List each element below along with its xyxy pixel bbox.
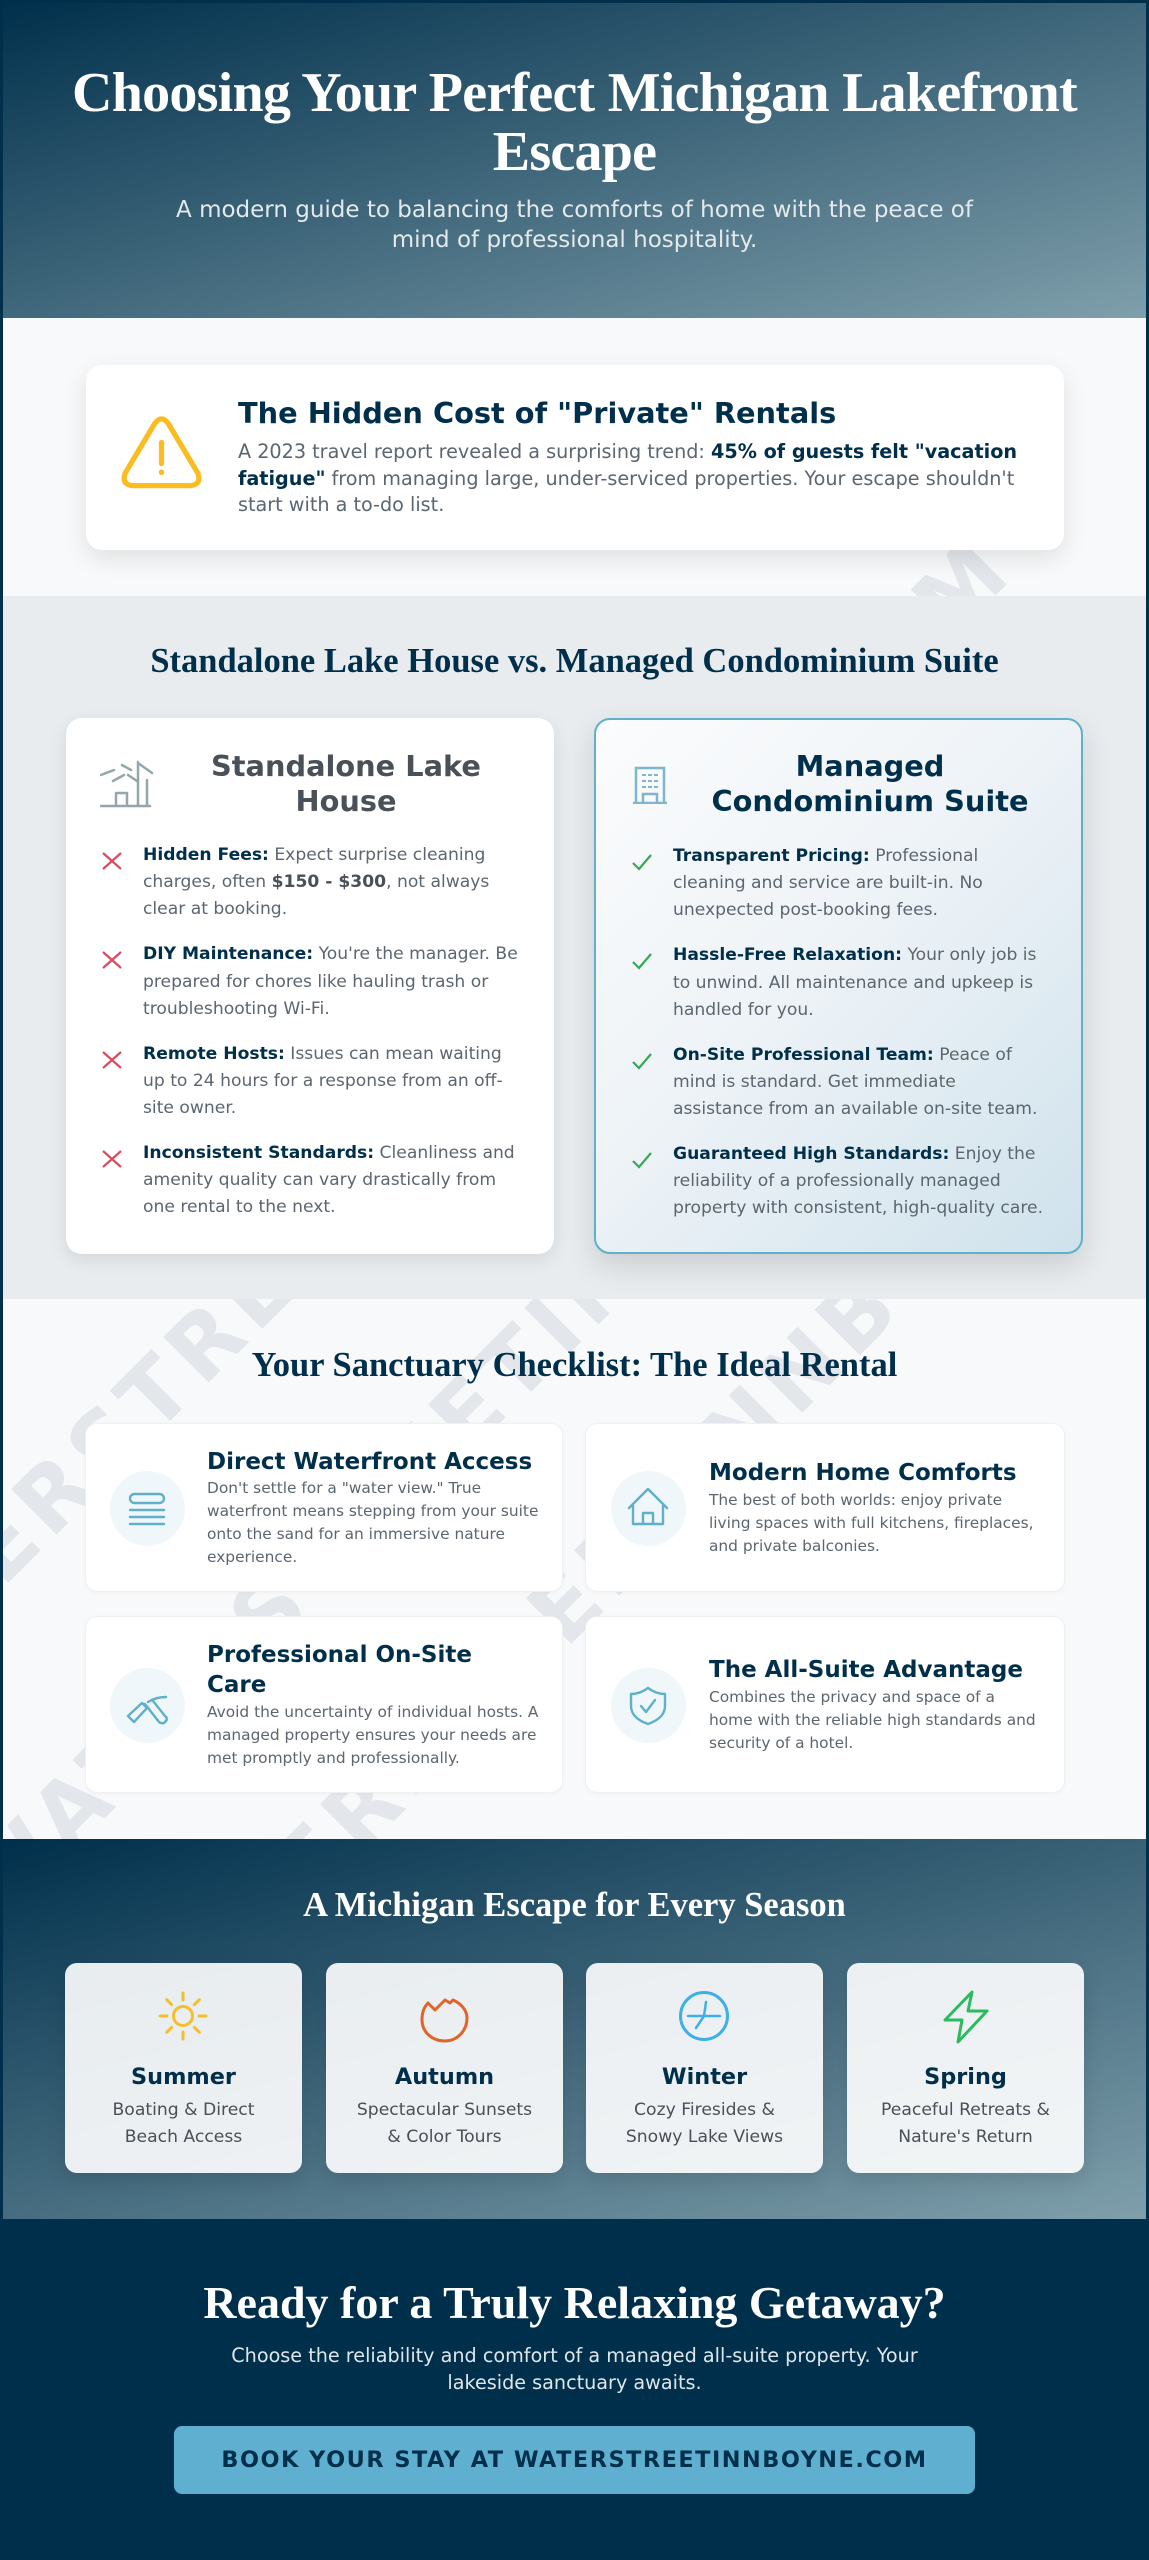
cta text xyxy=(231,2344,918,2394)
list item xyxy=(632,1144,1043,1218)
list item: charges, often $150 - $300, not always xyxy=(143,872,489,892)
feature text: onto the sand for an immersive nature xyxy=(207,1525,505,1543)
callout text: fatigue" from managing large, under-serviced properties. Your escape shouldn't xyxy=(238,467,1014,490)
list item: Guaranteed High Standards: Enjoy the xyxy=(673,1144,1035,1164)
card heading: Managed xyxy=(796,749,944,783)
panel: spring xyxy=(847,1963,1084,2173)
list item: mind is standard. Get immediate xyxy=(673,1072,956,1092)
season text xyxy=(881,2100,1050,2146)
feature text xyxy=(708,1491,1034,1555)
list item: handled for you. xyxy=(673,1000,814,1020)
list item: unexpected post-booking fees. xyxy=(673,900,938,920)
feature text: managed property ensures your needs are xyxy=(207,1726,536,1744)
feature text: experience. xyxy=(207,1548,297,1566)
feature title: Modern Home Comforts xyxy=(709,1460,1017,1486)
icon: house xyxy=(611,1471,686,1546)
list item xyxy=(632,945,1036,1020)
list item: Remote Hosts: Issues can mean waiting xyxy=(143,1044,502,1064)
panel: all-suite advantage xyxy=(585,1616,1065,1793)
feature text: met promptly and professionally. xyxy=(207,1749,460,1767)
season text xyxy=(626,2100,783,2146)
list item: DIY Maintenance: You're the manager. Be xyxy=(143,944,518,964)
call to action xyxy=(0,2219,1149,2560)
comparison section xyxy=(0,596,1149,1299)
subtitle: A modern guide to balancing the comforts of home with the peace of xyxy=(176,197,973,223)
icon: shield check xyxy=(611,1668,686,1743)
checklist heading: Your Sanctuary Checklist: The Ideal Rental xyxy=(252,1346,897,1384)
icon: cross xyxy=(102,1150,122,1168)
feature text: Combines the privacy and space of a xyxy=(709,1688,995,1706)
panel: direct waterfront access xyxy=(85,1423,563,1592)
panel: summer xyxy=(65,1963,302,2173)
season text: Beach Access xyxy=(125,2126,242,2146)
subtitle xyxy=(176,197,974,253)
icon: cross xyxy=(102,1051,122,1069)
list item: property with consistent, high-quality care. xyxy=(673,1198,1043,1218)
panel: winter xyxy=(586,1963,823,2173)
panel: autumn xyxy=(326,1963,563,2173)
callout text: A 2023 travel report revealed a surprising trend: 45% of guests felt "vacation xyxy=(238,440,1017,463)
icon: cross xyxy=(102,951,122,969)
card heading: House xyxy=(295,784,397,818)
season text: Spectacular Sunsets xyxy=(357,2100,532,2120)
season text: Snowy Lake Views xyxy=(626,2126,783,2146)
list item: amenity quality can vary drastically from xyxy=(143,1170,496,1190)
list item: cleaning and service are built-in. No xyxy=(673,873,983,893)
cta button xyxy=(174,2426,975,2494)
list item: On-Site Professional Team: Peace of xyxy=(673,1045,1012,1065)
card heading xyxy=(711,749,1028,818)
season name: Spring xyxy=(924,2064,1007,2090)
feature title xyxy=(207,1642,472,1698)
list item: Hassle-Free Relaxation: Your only job is xyxy=(673,945,1036,965)
season text xyxy=(357,2100,532,2146)
panel: professional on-site care xyxy=(85,1616,563,1793)
title: Choosing Your Perfect Michigan Lakefront xyxy=(72,62,1077,124)
feature text: living spaces with full kitchens, fireplaces, xyxy=(709,1514,1034,1532)
panel: managed condominium suite xyxy=(594,718,1083,1254)
feature title: Care xyxy=(207,1672,266,1698)
cta text: lakeside sanctuary awaits. xyxy=(447,2370,702,2394)
panel: standalone lake house xyxy=(66,718,554,1254)
callout text xyxy=(238,440,1017,516)
cta text: Choose the reliability and comfort of a managed all-suite property. Your xyxy=(231,2344,918,2366)
feature title: Professional On-Site xyxy=(207,1642,472,1668)
card heading xyxy=(211,749,481,818)
season name: Autumn xyxy=(395,2064,494,2090)
feature title: Direct Waterfront Access xyxy=(207,1449,532,1475)
cta button: BOOK YOUR STAY AT WATERSTREETINNBOYNE.COM xyxy=(221,2447,928,2473)
card heading: Standalone Lake xyxy=(211,749,481,783)
callout text: start with a to-do list. xyxy=(238,493,444,516)
seasons section xyxy=(0,1839,1149,2219)
intro section xyxy=(81,383,1069,563)
seasons heading: A Michigan Escape for Every Season xyxy=(303,1886,846,1924)
season name: Winter xyxy=(662,2064,747,2090)
feature text: Avoid the uncertainty of individual hosts. A xyxy=(207,1703,538,1721)
feature text xyxy=(207,1479,538,1566)
feature text: home with the reliable high standards and xyxy=(709,1711,1036,1729)
panel: hidden cost callout xyxy=(86,364,1064,550)
icon: tools xyxy=(110,1668,185,1743)
list item xyxy=(102,845,489,919)
season name: Summer xyxy=(131,2064,236,2090)
list item: Transparent Pricing: Professional xyxy=(673,846,978,866)
icon: check xyxy=(632,1053,652,1070)
icon: check xyxy=(632,1152,652,1169)
callout heading: The Hidden Cost of "Private" Rentals xyxy=(238,396,836,430)
feature title: The All-Suite Advantage xyxy=(709,1657,1023,1683)
list item: Inconsistent Standards: Cleanliness and xyxy=(143,1143,515,1163)
season text: Nature's Return xyxy=(898,2126,1033,2146)
list item: Hidden Fees: Expect surprise cleaning xyxy=(143,845,485,865)
list item: assistance from an available on-site team. xyxy=(673,1099,1037,1119)
list item: reliability of a professionally managed xyxy=(673,1171,1001,1191)
card heading: Condominium Suite xyxy=(711,784,1028,818)
panel: modern home comforts xyxy=(585,1423,1065,1592)
feature text: waterfront means stepping from your suite xyxy=(207,1502,538,1520)
list item xyxy=(632,1045,1037,1119)
list item: troubleshooting Wi-Fi. xyxy=(143,999,330,1019)
feature text: security of a hotel. xyxy=(709,1734,853,1752)
comparison heading: Standalone Lake House vs. Managed Condominium Suite xyxy=(150,642,999,680)
feature text: The best of both worlds: enjoy private xyxy=(709,1491,1002,1509)
title: Escape xyxy=(493,121,656,183)
icon: waves xyxy=(110,1471,185,1546)
title xyxy=(72,62,1078,183)
icon: warning triangle xyxy=(121,416,202,488)
list item xyxy=(102,1044,503,1118)
icon: palm and house xyxy=(100,760,154,808)
feature text: Don't settle for a "water view." True xyxy=(207,1479,481,1497)
list item: site owner. xyxy=(143,1098,236,1118)
icon: leaf xyxy=(420,1998,468,2042)
list item: prepared for chores like hauling trash or xyxy=(143,972,488,992)
list item xyxy=(102,944,518,1019)
feature text: and private balconies. xyxy=(709,1537,880,1555)
feature text xyxy=(207,1703,538,1767)
icon: condo building xyxy=(633,766,667,804)
cta heading: Ready for a Truly Relaxing Getaway? xyxy=(203,2277,946,2328)
list item xyxy=(102,1143,515,1217)
icon: check xyxy=(632,854,652,871)
list item xyxy=(632,846,983,920)
list item: one rental to the next. xyxy=(143,1197,336,1217)
icon: bolt xyxy=(943,1990,989,2044)
header banner xyxy=(0,0,1149,318)
icon: cross xyxy=(102,852,122,870)
feature text xyxy=(709,1688,1036,1752)
icon: check xyxy=(632,953,652,970)
list item: to unwind. All maintenance and upkeep is xyxy=(673,972,1033,992)
season text: Boating & Direct xyxy=(113,2100,254,2120)
season text: Peaceful Retreats & xyxy=(881,2100,1050,2120)
list item: up to 24 hours for a response from an off- xyxy=(143,1071,503,1091)
season text: Cozy Firesides & xyxy=(634,2100,775,2120)
season text: & Color Tours xyxy=(387,2126,502,2146)
checklist section xyxy=(85,1346,1065,1793)
list item: clear at booking. xyxy=(143,899,287,919)
subtitle: mind of professional hospitality. xyxy=(392,227,757,253)
icon: sun xyxy=(158,1992,208,2040)
icon: snow compass xyxy=(679,1991,729,2041)
season text xyxy=(113,2100,254,2146)
